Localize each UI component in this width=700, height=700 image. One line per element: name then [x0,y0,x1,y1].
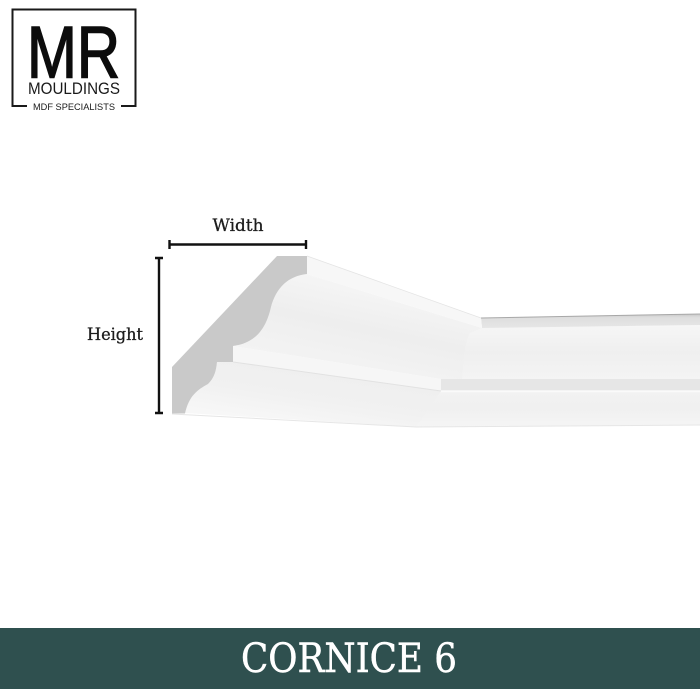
logo tagline: MDF SPECIALISTS [33,102,115,113]
logo frame [12,10,136,106]
upper return cove [233,274,482,379]
height label: Height [87,325,143,345]
top band face [307,256,482,328]
upper long section [441,325,700,380]
logo letters MR: MR [27,12,120,94]
title band [0,628,700,689]
lower return cove [185,362,441,427]
logo word MOULDINGS: MOULDINGS [28,79,120,98]
height bar [155,258,163,413]
cut end grey profile [172,256,307,414]
step band face [233,346,441,391]
title: CORNICE 6 [241,636,457,682]
logo: MR Mouldings [12,10,136,113]
width dimension [170,216,306,249]
lower long section [415,390,700,427]
top recessed strip [481,314,700,328]
width label: Width [212,216,264,236]
band background [0,628,700,689]
cornice moulding [172,256,700,427]
height dimension [87,258,163,413]
width bar [170,240,306,249]
middle recessed strip [441,379,700,390]
